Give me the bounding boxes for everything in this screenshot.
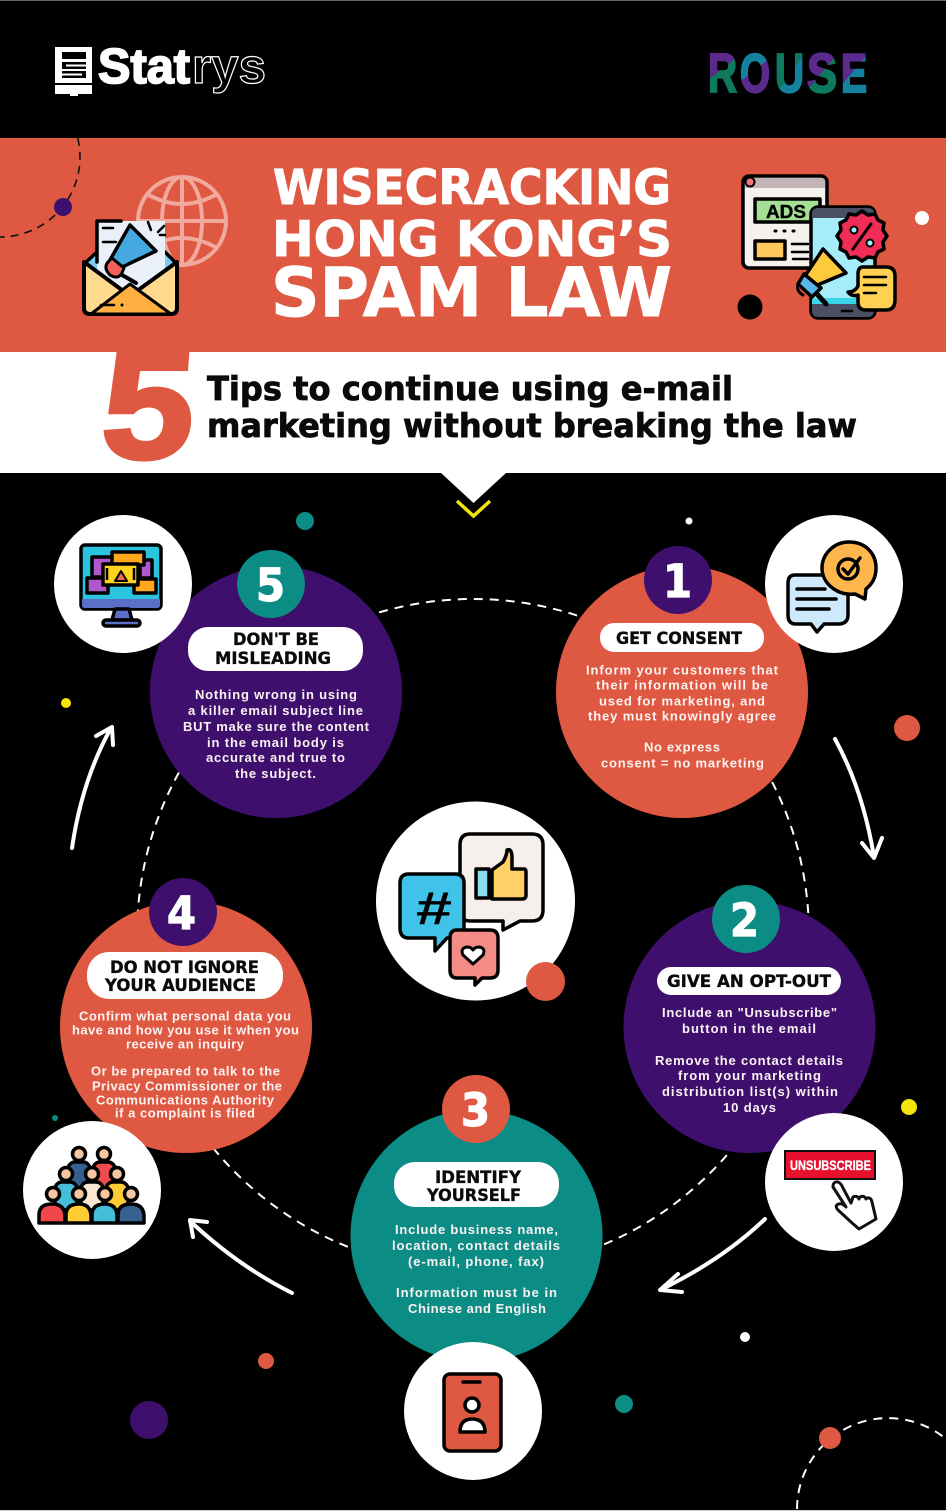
heading pill: MISLEADING [215, 649, 331, 668]
title banner [0, 138, 946, 352]
dot: banner black [738, 294, 762, 320]
Rouse logo: O [740, 42, 770, 104]
body text: location, contact details [392, 1238, 560, 1253]
number badge 2 [712, 885, 780, 953]
dashed cycle ring [137, 599, 809, 1271]
heading pill: YOURSELF [426, 1186, 521, 1205]
body text: Privacy Commissioner or the [92, 1078, 282, 1094]
panel: tip 5 [54, 515, 402, 818]
body text: their information will be [596, 678, 768, 692]
subtitle: marketing without breaking the law [207, 406, 857, 445]
body text: accurate and true to [206, 750, 345, 765]
body text: the subject. [235, 766, 316, 781]
icon circle: central social bubbles: # [416, 882, 452, 934]
subtitle [207, 369, 857, 445]
big number 5: 5 [97, 321, 201, 491]
body text: Chinese and English [408, 1301, 546, 1316]
Rouse logo: R [708, 42, 737, 104]
icon circle: unsubscribe button [765, 1113, 903, 1251]
body text: Or be prepared to talk to the [91, 1064, 280, 1078]
arrow: 2 to 3 [660, 1219, 765, 1292]
panel: tip 4 [23, 878, 312, 1259]
body text [72, 1008, 299, 1120]
title [271, 160, 672, 333]
subtitle band [0, 352, 946, 503]
heading pill [600, 623, 764, 652]
body text: BUT make sure the content [183, 719, 370, 734]
body text [655, 1005, 843, 1115]
heading pill: DO NOT IGNORE [110, 958, 259, 977]
body text: Communications Authority [96, 1092, 275, 1108]
arrow: 4 to 5 [72, 727, 113, 848]
heading pill: YOUR AUDIENCE [104, 976, 256, 995]
body text: Information must be in [396, 1285, 557, 1300]
heading pill [188, 627, 363, 671]
number badge 3: 3 [461, 1084, 490, 1137]
number badge 3 [442, 1075, 510, 1143]
body text: Inform your customers that [586, 662, 779, 678]
number badge 4: 4 [167, 887, 196, 940]
body text [183, 687, 370, 781]
body text: have and how you use it when you [72, 1022, 299, 1038]
Rouse logo: S [807, 42, 837, 104]
number badge 5: 5 [256, 559, 285, 612]
heading pill: GIVE AN OPT-OUT [667, 972, 832, 991]
body text [586, 662, 779, 770]
panel: tip 2 [624, 885, 903, 1251]
decorative dots [52, 512, 920, 1439]
bottom right dashed arc and dot [797, 1418, 946, 1509]
arrow: 3 to 4 [190, 1220, 292, 1293]
heading pill: DON'T BE [233, 630, 319, 649]
icon circle: unsubscribe button: UNSUBSCRIBE [790, 1157, 871, 1173]
heading pill [394, 1162, 559, 1207]
banner dashed arc and dot [0, 138, 80, 237]
heading pill: IDENTIFY [435, 1168, 522, 1187]
Rouse logo [708, 42, 867, 104]
Statrys logo: Stat [98, 40, 190, 94]
icon circle: central social bubbles [376, 802, 575, 1000]
title: HONG KONG’S [272, 211, 672, 268]
Statrys logo [55, 40, 266, 96]
body text: used for marketing, and [599, 694, 765, 708]
body text: Confirm what personal data you [79, 1008, 291, 1024]
body text: from your marketing [678, 1068, 821, 1083]
body text: Include business name, [395, 1222, 558, 1237]
heading pill [87, 952, 283, 999]
icon: globe [138, 177, 226, 265]
body text: Include an "Unsubscribe" [662, 1005, 837, 1020]
heading pill: GET CONSENT [616, 629, 743, 648]
dot: central red [526, 962, 565, 1001]
body text: Remove the contact details [655, 1053, 843, 1068]
icon: ads on browser and phone: ADS [766, 202, 806, 222]
icon: ads on browser and phone [743, 176, 895, 318]
body text [392, 1222, 560, 1316]
icon circle: id card [404, 1342, 542, 1480]
body text: consent = no marketing [601, 756, 764, 770]
Rouse logo: U [775, 42, 804, 104]
Rouse logo: E [841, 42, 867, 104]
body text: in the email body is [207, 735, 344, 750]
panel: tip 1 [556, 515, 903, 818]
number badge 2: 2 [730, 894, 759, 947]
body text: they must knowingly agree [588, 708, 776, 724]
body text: receive an inquiry [126, 1036, 245, 1052]
number badge 4 [149, 878, 217, 946]
body text: a killer email subject line [188, 703, 363, 718]
arrow: 1 to 2 [835, 739, 882, 858]
body text: 10 days [723, 1100, 776, 1115]
subtitle: Tips to continue using e-mail [207, 369, 733, 408]
body text: distribution list(s) within [662, 1084, 838, 1099]
icon circle: audience [23, 1121, 161, 1259]
icon: envelope with megaphone [84, 221, 177, 314]
icon circle: consent chat [765, 515, 903, 653]
title: WISECRACKING [273, 160, 671, 216]
body text: Nothing wrong in using [195, 687, 357, 702]
panel: tip 3 [350, 1075, 602, 1480]
body text: if a complaint is filed [115, 1106, 255, 1120]
number badge 1: 1 [663, 555, 692, 608]
number badge 1 [644, 546, 712, 614]
Statrys logo: rys [192, 40, 266, 94]
icon: yellow chevron [457, 501, 490, 516]
number badge 5 [237, 550, 305, 618]
heading pill [657, 967, 841, 995]
dot: banner white [915, 211, 929, 225]
body text: button in the email [682, 1021, 816, 1036]
body text: (e-mail, phone, fax) [408, 1254, 544, 1269]
title: SPAM LAW [271, 254, 672, 333]
body text: No express [644, 740, 720, 754]
icon circle: monitor alerts [54, 515, 192, 653]
